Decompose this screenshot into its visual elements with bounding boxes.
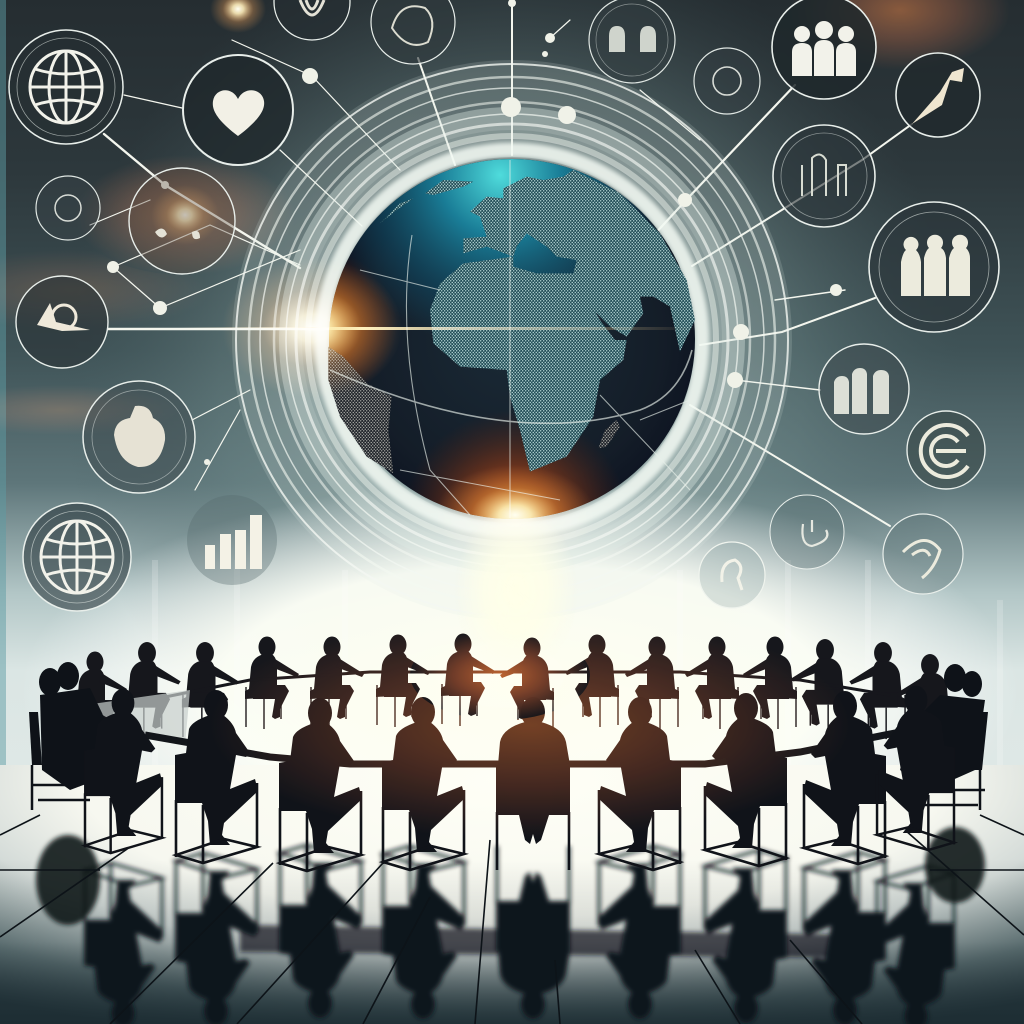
icon: globe bottom left: [23, 503, 131, 611]
icon: flare ring left: [129, 168, 235, 274]
network nodes: [107, 0, 842, 465]
concentric rings around the globe: [236, 64, 788, 616]
back table edge: [150, 672, 890, 700]
network connector lines: [90, 0, 912, 526]
floor seam lines: [0, 815, 1024, 1024]
right corner group of people: [900, 664, 988, 810]
icon: fist: [83, 381, 195, 493]
icon: three people top right: [772, 0, 876, 99]
icon: top ring two: [371, 0, 455, 64]
icon: ring bottom right: [883, 514, 963, 594]
horizontal lens flare: [151, 0, 700, 565]
floor reflection of the table and people: [36, 827, 985, 1024]
warm corner light: [0, 0, 1010, 435]
icon: globe top left: [9, 30, 123, 144]
icon: bar chart: [187, 495, 277, 585]
icon: top ring one: [274, 0, 350, 40]
icon: outlined group: [773, 125, 875, 227]
icon: three people mid right: [819, 344, 909, 434]
left corner group of people: [29, 662, 115, 810]
front table edge: [145, 732, 900, 764]
icon: hand ring left: [16, 276, 108, 368]
background wall: [0, 0, 1024, 780]
icon: ring lower centre right: [699, 542, 765, 608]
warm glow on the central people: [210, 610, 850, 840]
icon: small ring top: [694, 48, 760, 114]
icon: small ring left: [36, 176, 100, 240]
icon: three people right: [869, 202, 999, 332]
table top reflection: [85, 690, 190, 745]
icon: ring lower right: [770, 495, 844, 569]
icon: spiral: [907, 411, 985, 489]
globe grid lines: [330, 160, 692, 518]
floor: [0, 765, 1024, 1024]
icon: arrow: [896, 53, 980, 137]
continents: dotted land masses: [328, 170, 695, 473]
back row of seated people: [73, 634, 953, 751]
globe: [328, 159, 695, 519]
vertical glow beneath the globe: [454, 505, 578, 675]
icon: heart: [183, 55, 293, 165]
front row of seated people: [84, 686, 955, 871]
icon: people top: [589, 0, 675, 83]
